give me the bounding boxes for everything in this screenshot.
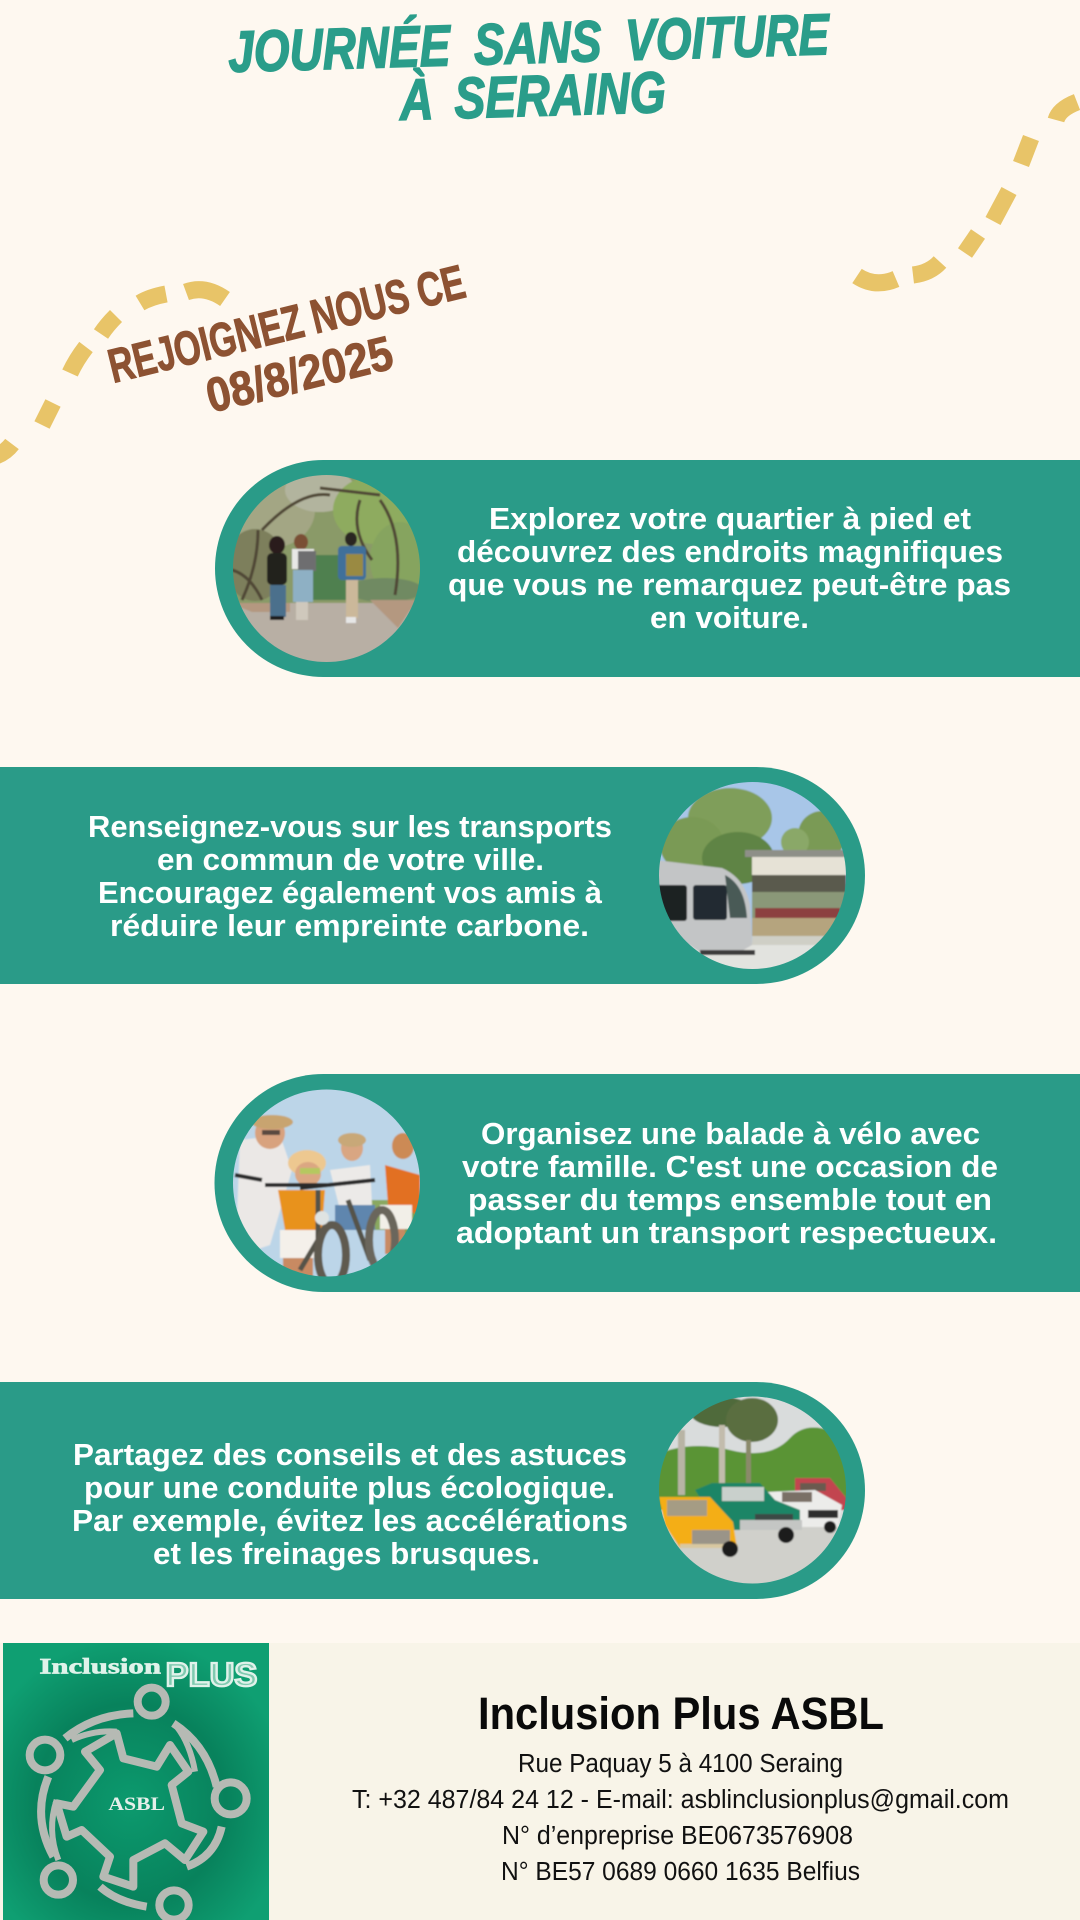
footer background [0,1643,1080,1920]
text [456,1116,998,1250]
date heading: 08/8/2025 [201,327,398,423]
contact details: Rue Paquay 5 à 4100 Seraing [518,1750,843,1778]
panel: footer [0,1643,1080,1920]
text: Partagez des conseils et des astuces [73,1437,627,1472]
text: Encouragez également vos amis à [98,875,603,910]
contact details: N° d’enpreprise BE0673576908 [502,1822,853,1850]
photo: vintage cars [659,1396,846,1584]
photo: bus at station [655,778,850,975]
title: À SERAING [397,60,667,133]
text: pour une conduite plus écologique. [84,1470,615,1505]
panel: eco driving [0,1382,865,1599]
white car [765,1490,842,1527]
band 4 [0,1382,865,1599]
walker right [345,532,357,546]
band 2 [0,767,865,984]
walker middle [294,534,308,550]
decorative dashed path: left [0,290,225,456]
panel: bike ride [214,1074,1080,1292]
child [278,1190,325,1230]
text: réduire leur empreinte carbone. [110,908,589,943]
date heading: REJOIGNEZ NOUS CE [103,256,470,394]
father [237,1135,292,1250]
handlebars and wheels [235,1175,375,1188]
panel: public transport [0,767,865,984]
text [448,501,1011,635]
red car [795,1478,848,1510]
logo: Inclusion Plus: PLUS [166,1657,257,1694]
logo: Inclusion Plus [3,1643,269,1920]
green car [695,1483,800,1530]
title: JOURNÉE SANS VOITURE [227,2,832,85]
girl [385,1165,420,1215]
text [72,1437,628,1571]
photo: family on bikes [233,1090,420,1276]
text: en voiture. [650,600,809,635]
text: que vous ne remarquez peut-être pas [448,567,1011,602]
text: Renseignez-vous sur les transports [88,809,612,844]
text [88,809,612,943]
title [227,2,833,138]
text: Explorez votre quartier à pied et [489,501,971,536]
decorative dashed path: right [857,102,1077,283]
contact details: N° BE57 0689 0660 1635 Belfius [501,1858,860,1886]
mother [330,1165,372,1210]
contact details: T: +32 487/84 24 12 - E-mail: asblinclusionplus@gmail.com [352,1786,1009,1814]
photo: walkers on a path [233,475,420,662]
contact details [352,1750,1009,1886]
band 1 [215,460,1080,677]
band 3 [214,1074,1080,1292]
date heading [103,256,483,444]
panel: walk [215,460,1080,677]
text: et les freinages brusques. [153,1536,540,1571]
text: découvrez des endroits magnifiques [457,534,1003,569]
text: en commun de votre ville. [157,842,544,877]
text: Par exemple, évitez les accélérations [72,1503,628,1538]
text: Organisez une balade à vélo avec [481,1116,980,1151]
logo: Inclusion Plus: Inclusion [39,1653,161,1678]
text: adoptant un transport respectueux. [456,1215,997,1250]
logo: Inclusion Plus: ASBL [108,1794,165,1815]
yellow car [659,1497,737,1548]
organisation name: Inclusion Plus ASBL [478,1688,884,1739]
text: passer du temps ensemble tout en [468,1182,992,1217]
text: votre famille. C'est une occasion de [462,1149,998,1184]
walker left [269,536,285,554]
